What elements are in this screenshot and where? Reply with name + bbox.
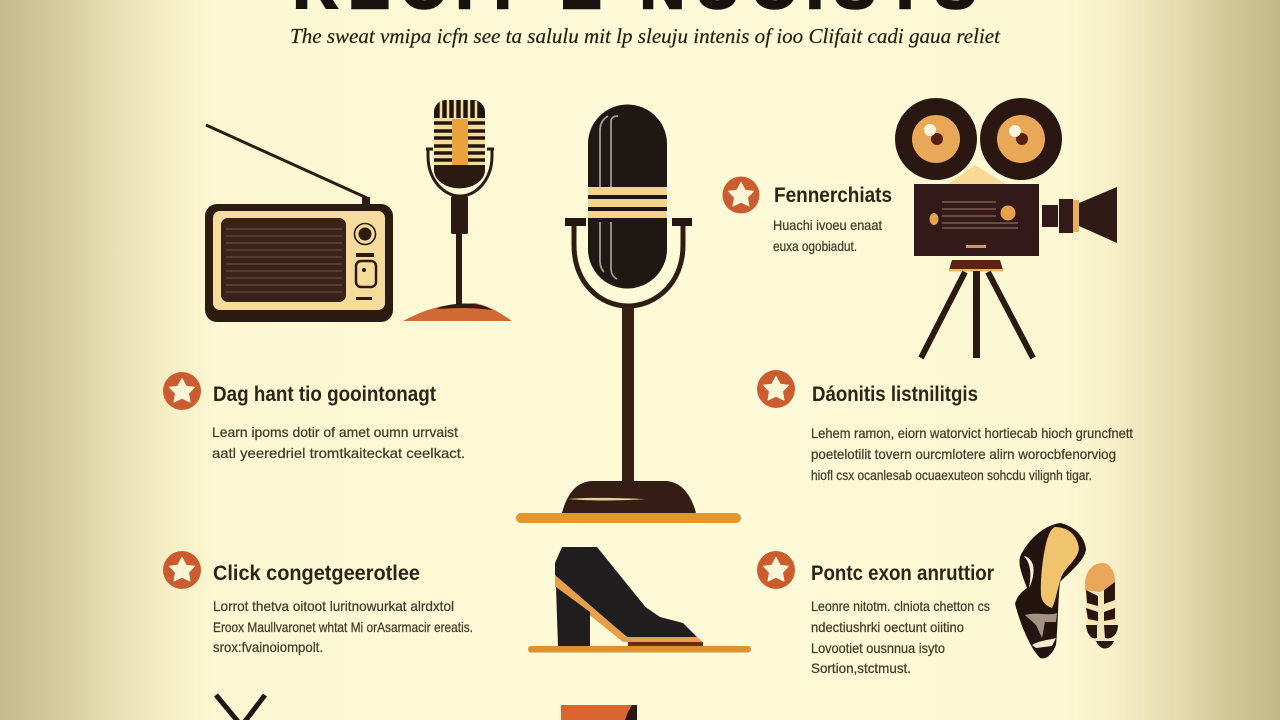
body text	[212, 424, 465, 461]
body text: Sortion,stctmust.	[811, 660, 911, 676]
body text: hiofl csx ocanlesab ocuaexuteon sohcdu vilignh tigar.	[811, 467, 1092, 483]
icon: high heel shoe	[528, 547, 751, 652]
body text: euxa ogobiadut.	[773, 238, 857, 254]
icon: radio	[205, 125, 393, 322]
body text: Learn ipoms dotir of amet oumn urrvaist	[212, 424, 458, 440]
heading: Dáonitis listnilitgis	[812, 383, 978, 406]
body text: Lovootiet ousnnua isyto	[811, 640, 945, 656]
body text: Leonre nitotm. clniota chetton cs	[811, 598, 990, 614]
heading: Pontc exon anruttior	[811, 562, 994, 585]
body text: Eroox Maullvaronet whtat Mi orAsarmacir ereatis.	[213, 619, 473, 635]
star badge	[757, 551, 795, 589]
body text: Huachi ivoeu enaat	[773, 217, 882, 233]
feature: lower right	[757, 551, 994, 676]
body text: poetelotilit tovern ourcmlotere alirn worocbfenorviog	[811, 446, 1116, 462]
feature: top right	[722, 176, 892, 254]
heading: Fennerchiats	[774, 184, 892, 207]
star badge	[722, 176, 760, 214]
body text: Lehem ramon, eiorn watorvict hortiecab hioch gruncfnett	[811, 425, 1133, 441]
heading: Dag hant tio goointonagt	[213, 383, 436, 406]
icon: crossed tripod legs cut off at bottom	[216, 695, 265, 720]
icon: small studio microphone	[403, 100, 512, 321]
star badge	[163, 551, 201, 589]
icon: dance shoe soles	[1015, 523, 1118, 658]
body text: ndectiushrki oectunt oiitino	[811, 619, 964, 635]
body text: Lorrot thetva oitoot luritnowurkat alrdxtol	[213, 598, 454, 614]
star badge	[163, 372, 201, 410]
feature: middle left	[163, 372, 465, 461]
icon: large central microphone	[516, 105, 741, 523]
body text	[811, 598, 990, 676]
body text: srox:fvainoiompolt.	[213, 639, 323, 655]
body text	[811, 425, 1133, 483]
feature: middle right	[757, 370, 1133, 483]
body text: aatl yeeredriel tromtkaiteckat ceelkact.	[212, 445, 465, 461]
heading: Click congetgeerotlee	[213, 562, 420, 585]
icon: film camera	[895, 98, 1117, 358]
body text	[213, 598, 473, 655]
feature: lower left	[163, 551, 473, 655]
subtitle: The sweat vmipa icfn see ta salulu mit lp sleuju intenis of ioo Clifait cadi gaua reliet	[290, 24, 1001, 48]
star badge	[757, 370, 795, 408]
body text	[773, 217, 882, 254]
icon: orange object cut off at bottom	[561, 705, 637, 720]
